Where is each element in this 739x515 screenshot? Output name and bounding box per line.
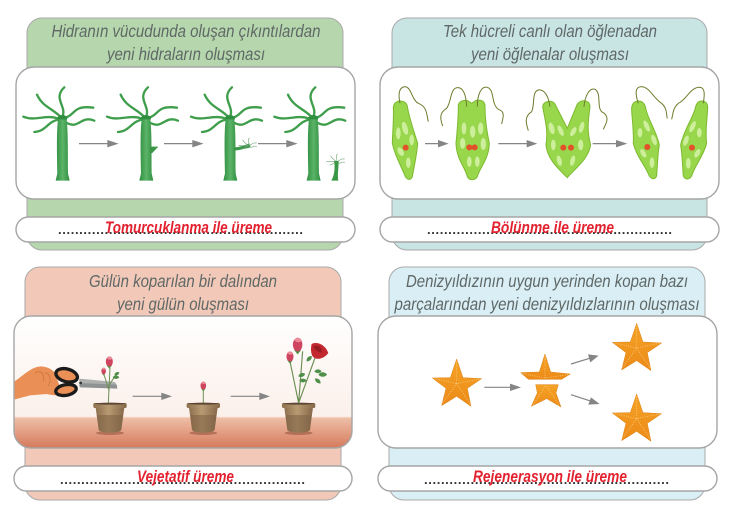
panel: vegetative reproduction (rose) bbox=[10, 267, 352, 500]
icon: euglena stage 3 bbox=[526, 89, 607, 178]
dotted line: .......................................................... bbox=[60, 472, 305, 487]
heading: yeni öğlenalar oluşması bbox=[470, 44, 629, 64]
answer strip bbox=[14, 466, 352, 491]
answer text: Tomurcuklanma ile üreme bbox=[105, 219, 272, 237]
icon: hydra stage 4 with offspring bbox=[274, 87, 345, 181]
arrow 1 bbox=[79, 140, 119, 147]
icon: new starfish top bbox=[612, 323, 662, 371]
arrow 2 bbox=[231, 393, 270, 400]
heading: Hidranın vücudunda oluşan çıkıntılardan bbox=[52, 21, 320, 41]
icon: new starfish bottom bbox=[612, 394, 662, 441]
heading: yeni gülün oluşması bbox=[116, 294, 249, 314]
icon: euglena stage 4 right bbox=[672, 87, 708, 179]
illustration box border bbox=[14, 316, 352, 448]
answer strip bbox=[16, 217, 355, 242]
answer text: Bölünme ile üreme bbox=[491, 219, 614, 237]
panel: division (euglena) bbox=[380, 18, 719, 250]
icon: hydra stage 1 bbox=[23, 87, 94, 181]
icon: pot with grown rose bbox=[282, 338, 328, 435]
panel background bbox=[25, 267, 341, 500]
answer text: Vejetatif üreme bbox=[137, 468, 234, 486]
arrow 2 bbox=[498, 140, 537, 147]
heading: Denizyıldızının uygun yerinden kopan bazı bbox=[406, 271, 688, 291]
icon: euglena stage 4 left bbox=[632, 87, 667, 179]
arrow 3 bbox=[258, 140, 298, 147]
icon: broken starfish bbox=[521, 354, 570, 407]
illustration box bbox=[378, 316, 717, 448]
icon: pot with rose 1 bbox=[93, 356, 127, 435]
icon: euglena stage 1 bbox=[392, 87, 428, 179]
icon: whole starfish bbox=[432, 359, 482, 406]
panel: regeneration (starfish) bbox=[378, 267, 717, 500]
illustration box bbox=[14, 316, 352, 448]
chart: starfish regeneration bbox=[432, 323, 662, 441]
arrow up bbox=[571, 354, 599, 364]
heading: parçalarından yeni denizyıldızlarının oluşması bbox=[394, 294, 700, 314]
chart: hydra budding sequence bbox=[23, 87, 345, 181]
arrow to broken starfish bbox=[484, 384, 521, 391]
icon: hydra stage 3 with bud bbox=[191, 87, 262, 181]
heading: Gülün koparılan bir dalından bbox=[89, 271, 277, 291]
illustration box bbox=[380, 67, 719, 199]
heading: Tek hücreli canlı olan öğlenadan bbox=[443, 21, 657, 41]
answer strip bbox=[378, 466, 717, 491]
icon: pot with cutting bbox=[187, 381, 220, 435]
panel: budding (hydra) bbox=[16, 18, 355, 250]
arrow 2 bbox=[164, 140, 204, 147]
icon: hand with scissors bbox=[10, 366, 117, 401]
panel background bbox=[392, 18, 707, 250]
dotted line: .......................................................... bbox=[424, 472, 669, 487]
dotted line: .......................................................... bbox=[427, 222, 672, 237]
heading: yeni hidraların oluşması bbox=[106, 44, 265, 64]
dotted line: .......................................................... bbox=[58, 222, 303, 237]
arrow 1 bbox=[425, 140, 449, 147]
illustration box bbox=[16, 67, 355, 199]
icon: euglena stage 2 bbox=[441, 87, 503, 180]
answer text: Rejenerasyon ile üreme bbox=[473, 468, 627, 486]
chart: rose cutting sequence bbox=[10, 338, 328, 435]
panel background bbox=[389, 267, 705, 500]
arrow 3 bbox=[593, 140, 627, 147]
icon: hydra stage 2 bbox=[107, 87, 178, 181]
answer strip bbox=[380, 217, 719, 242]
chart: euglena division sequence bbox=[392, 87, 708, 180]
arrow 1 bbox=[133, 393, 172, 400]
arrow down bbox=[571, 395, 600, 405]
panel background bbox=[27, 18, 343, 250]
